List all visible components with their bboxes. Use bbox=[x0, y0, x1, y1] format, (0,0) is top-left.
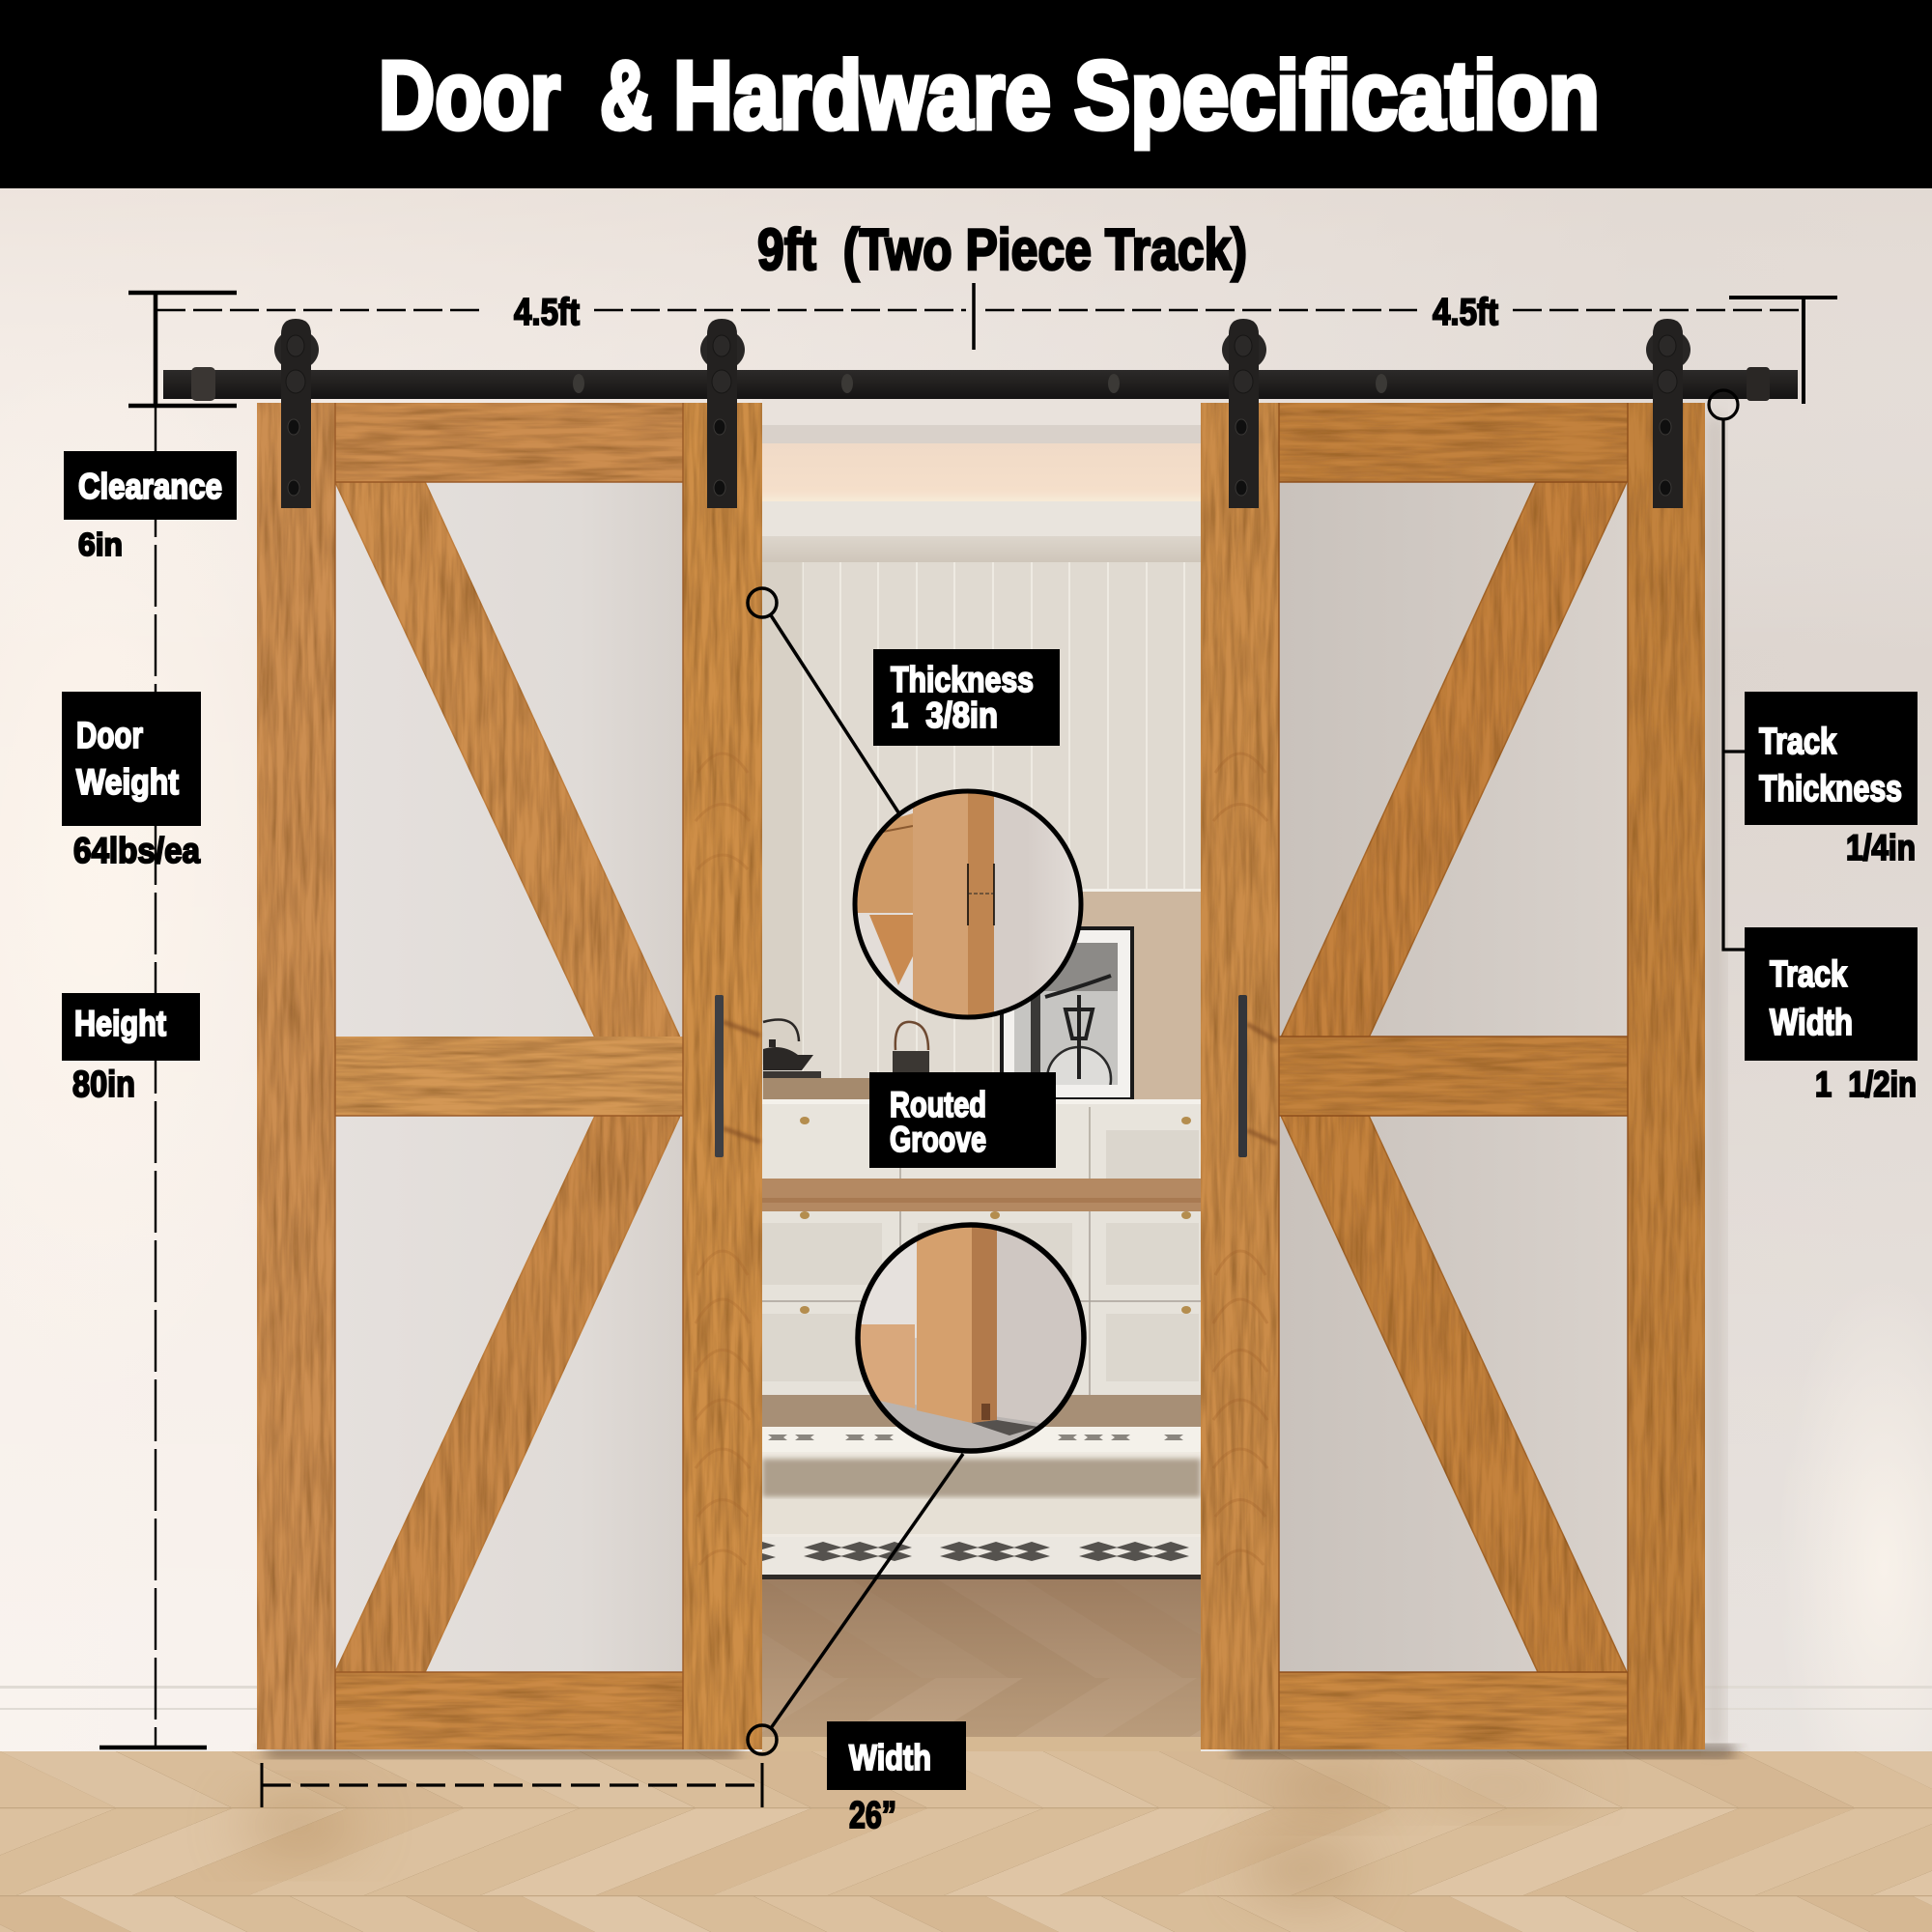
interior room seen through opening bbox=[762, 399, 1201, 1737]
framed bicycle photo bbox=[1002, 928, 1132, 1111]
width label: Width bbox=[849, 1738, 931, 1777]
left barn door bbox=[257, 403, 762, 1749]
herringbone floor bbox=[0, 1746, 1932, 1932]
thickness magnifier bbox=[853, 789, 1085, 1021]
sliding track rail bbox=[163, 367, 1798, 401]
routed groove label: Routed bbox=[890, 1085, 986, 1124]
routed groove magnifier bbox=[856, 1222, 1088, 1459]
width value: 26” bbox=[849, 1795, 896, 1836]
track width label: Width bbox=[1770, 1003, 1853, 1043]
top rail bbox=[335, 403, 683, 482]
handle shadows bbox=[724, 1022, 760, 1142]
height value: 80in bbox=[72, 1065, 135, 1105]
right stile bbox=[1628, 403, 1705, 1749]
wood grain figure on inner stile bbox=[1213, 753, 1267, 1565]
left stile bbox=[1201, 403, 1279, 1749]
right end stop bbox=[1747, 367, 1770, 401]
right barn door bbox=[1201, 403, 1705, 1749]
title: Door bbox=[379, 42, 560, 150]
hanger wheel and strap 4 bbox=[1646, 319, 1690, 508]
door handle bbox=[715, 995, 724, 1157]
clearance label: Clearance bbox=[78, 467, 222, 506]
thickness label: Thickness bbox=[891, 660, 1034, 699]
thickness callout marker and leader bbox=[748, 588, 898, 812]
door weight label bbox=[62, 692, 201, 826]
ceiling and crown moulding bbox=[762, 425, 1201, 562]
wood grain figure on inner stile bbox=[696, 753, 750, 1565]
title bbox=[379, 42, 1600, 150]
door weight value: 64lbs/ea bbox=[73, 831, 200, 870]
right half length label: 4.5ft bbox=[1433, 292, 1498, 333]
wooden counter bbox=[762, 1179, 1201, 1211]
track callout marker and leaders bbox=[1709, 390, 1745, 950]
track width label bbox=[1745, 927, 1918, 1061]
patterned rug bbox=[762, 1427, 1201, 1579]
left stile bbox=[257, 403, 335, 1749]
track width label: Track bbox=[1770, 954, 1848, 995]
header bar with title bbox=[0, 0, 1932, 188]
lower diagonal brace bbox=[335, 1116, 680, 1672]
floor section in front of opening bbox=[762, 1737, 1201, 1751]
hanger wheel and strap 2 bbox=[700, 319, 745, 508]
height label bbox=[62, 993, 200, 1061]
door panels bbox=[335, 482, 683, 1672]
door weight label: Door bbox=[76, 716, 143, 756]
hallway floor bbox=[762, 1579, 1201, 1737]
left teapot and tray bbox=[763, 1020, 871, 1099]
title: Hardware bbox=[673, 42, 1051, 150]
upper diagonal brace bbox=[335, 482, 680, 1037]
top rail bbox=[1279, 403, 1628, 482]
middle rail bbox=[1279, 1037, 1628, 1116]
door height dimension line bbox=[99, 406, 207, 1747]
door panels bbox=[1279, 482, 1628, 1672]
track thickness value: 1/4in bbox=[1846, 828, 1916, 867]
upper diagonal brace bbox=[1281, 482, 1627, 1037]
kitchen floor strip bbox=[762, 1395, 1201, 1427]
left half length label: 4.5ft bbox=[514, 292, 580, 333]
width callout marker and leader bbox=[748, 1454, 963, 1754]
thickness label: 1 3/8in bbox=[891, 696, 998, 735]
lower cabinets bbox=[762, 1211, 1201, 1395]
beige backsplash bbox=[1072, 889, 1201, 1103]
track length heading: 9ft (Two Piece Track) bbox=[757, 217, 1247, 282]
second teapot bbox=[893, 1022, 929, 1072]
bottom rail bbox=[1279, 1672, 1628, 1749]
track thickness label bbox=[1745, 692, 1918, 825]
hanger wheel and strap 1 bbox=[274, 319, 319, 508]
width label bbox=[827, 1721, 966, 1790]
track length dimension line bbox=[128, 283, 1837, 406]
routed groove label: Groove bbox=[890, 1120, 986, 1159]
title: Specification bbox=[1074, 42, 1600, 150]
title: & bbox=[600, 42, 652, 150]
door width dimension line bbox=[262, 1763, 762, 1807]
middle rail bbox=[335, 1037, 683, 1116]
lower diagonal brace bbox=[1281, 1116, 1627, 1672]
track thickness label: Track bbox=[1759, 722, 1837, 762]
clearance label bbox=[64, 451, 237, 520]
panelled wall bbox=[762, 562, 1201, 1103]
hanger wheel and strap 3 bbox=[1222, 319, 1266, 508]
thickness label bbox=[873, 649, 1060, 746]
clearance value: 6in bbox=[78, 526, 123, 562]
left end stop bbox=[191, 367, 215, 401]
door weight label: Weight bbox=[76, 762, 179, 802]
upper cabinets bbox=[762, 1099, 1201, 1179]
bottom rail bbox=[335, 1672, 683, 1749]
door handle bbox=[1238, 995, 1247, 1157]
handle shadows bbox=[1247, 1024, 1277, 1144]
wall shadow beside right door bbox=[1705, 415, 1724, 1748]
right stile bbox=[683, 403, 762, 1749]
height label: Height bbox=[74, 1004, 166, 1043]
routed groove label bbox=[869, 1072, 1056, 1168]
